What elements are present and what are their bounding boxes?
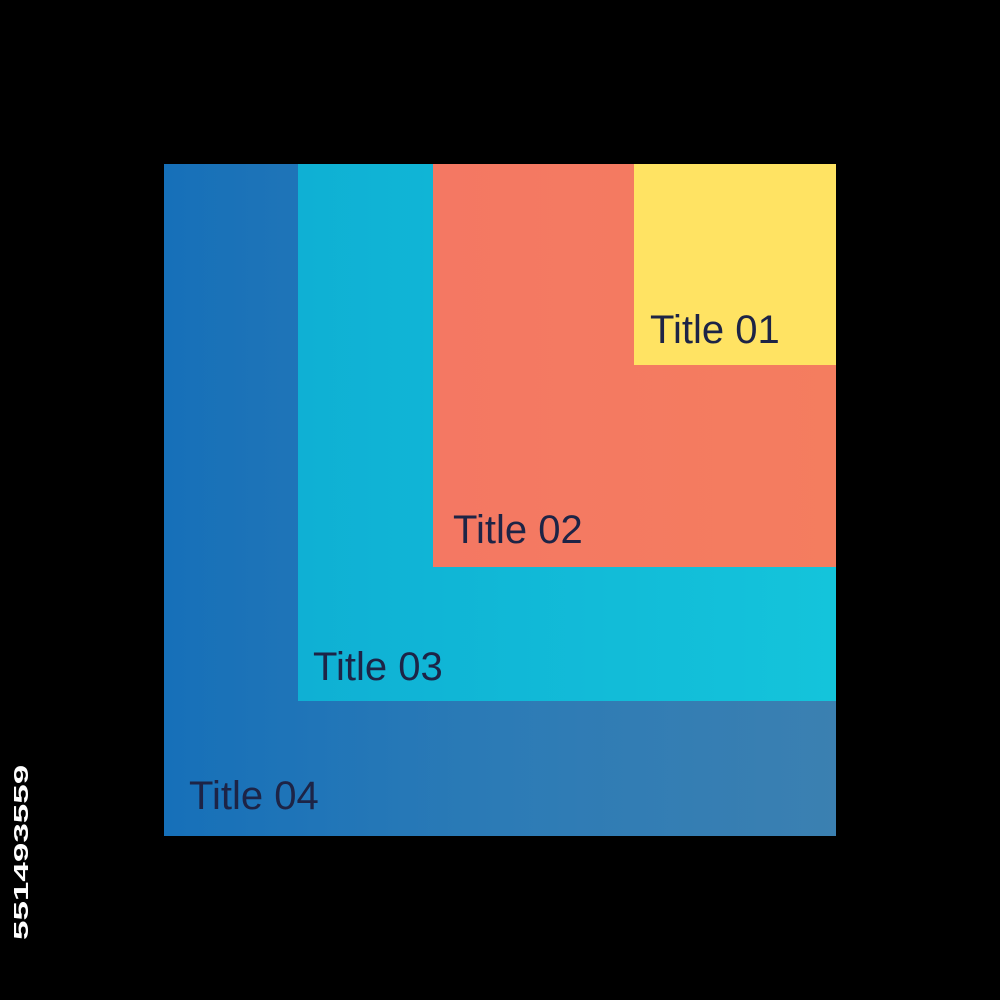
panel: title 03 block: [298, 164, 836, 701]
label: Title 01: Title 01: [650, 308, 780, 352]
panel: title 02 block: [433, 164, 836, 567]
label: Title 03: Title 03: [313, 645, 443, 689]
label: Title 04: Title 04: [189, 774, 319, 818]
panel: title 04 block: [164, 164, 836, 836]
stock id text: 551493559: [11, 765, 33, 940]
panel: title 01 block: [634, 164, 836, 365]
label: Title 02: Title 02: [453, 508, 583, 552]
